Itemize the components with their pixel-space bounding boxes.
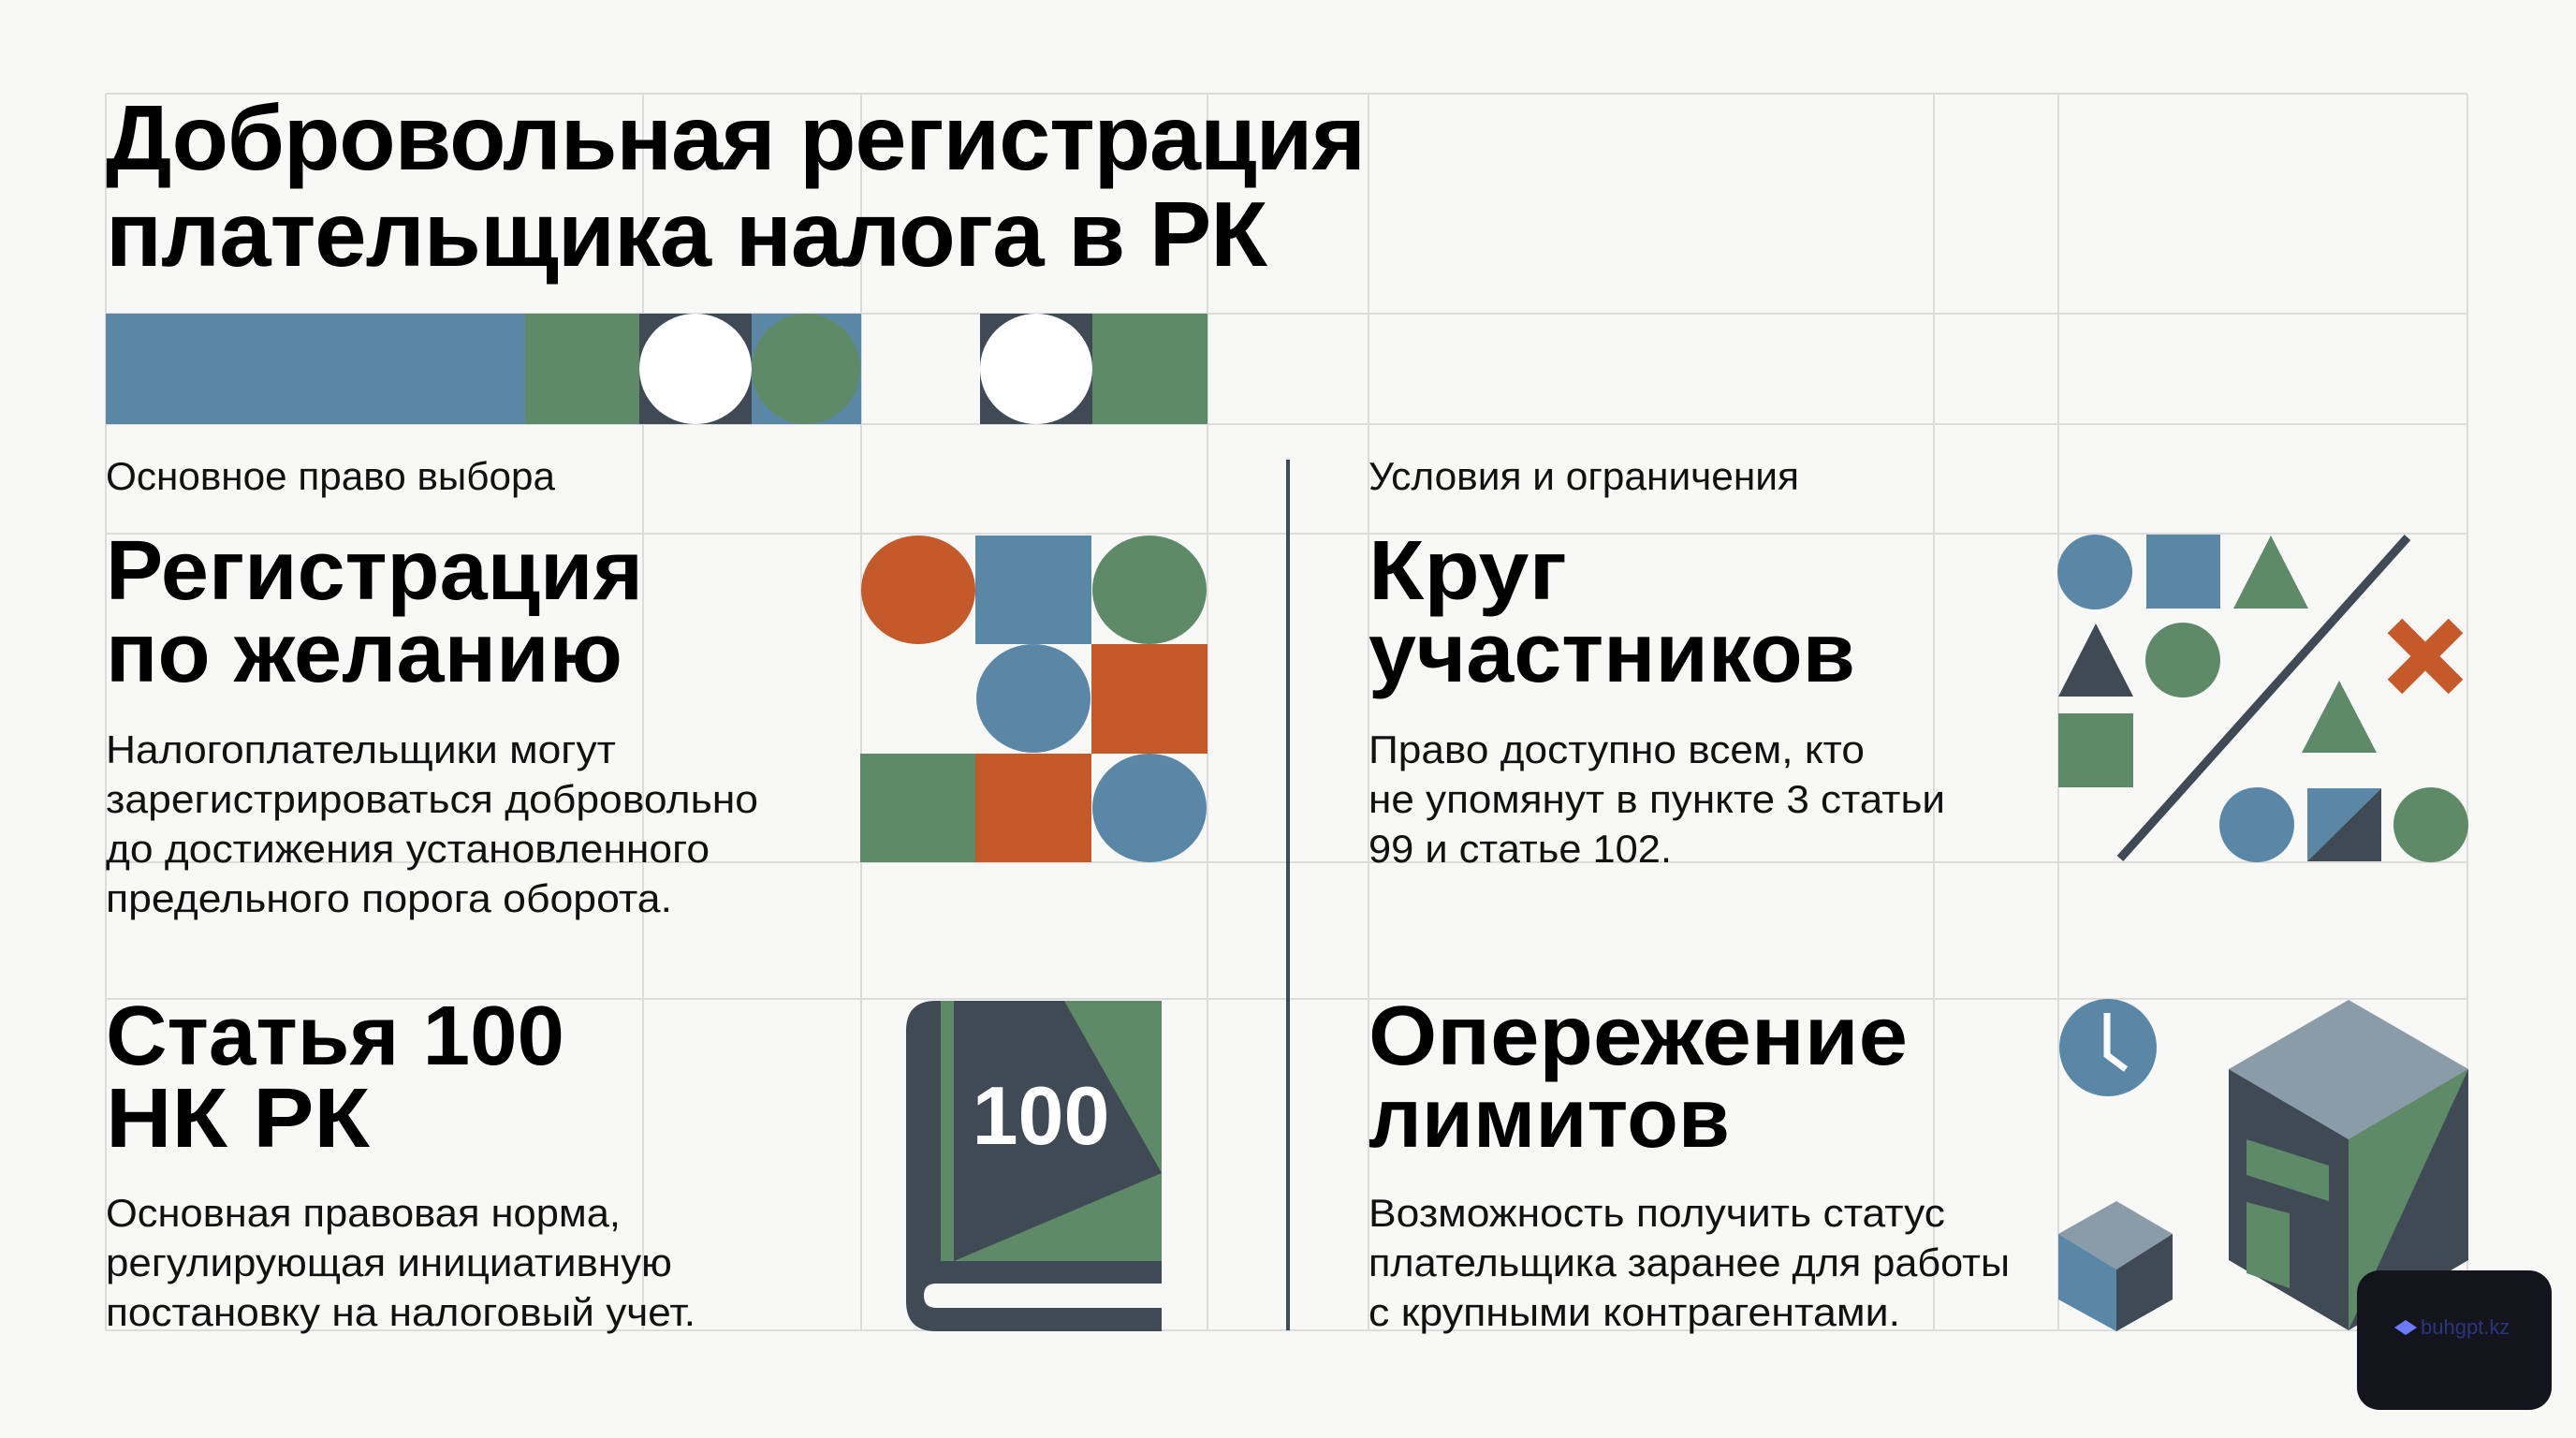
block: Опережение лимитов: плательщика заранее для работы <box>1368 1240 2010 1284</box>
watermark badge <box>2357 1270 2552 1410</box>
block: Опережение лимитов: с крупными контрагентами. <box>1368 1290 1900 1334</box>
section label: right: Условия и ограничения <box>1368 454 1799 498</box>
icon: book 100 <box>906 1001 1162 1331</box>
block: Статья 100 НК РК: Статья 100 <box>106 990 564 1083</box>
block: Регистрация по желанию: Налогоплательщики могут <box>106 727 616 771</box>
icon: book 100: 100 <box>973 1069 1109 1162</box>
title: Добровольная регистрация <box>106 86 1365 189</box>
section label: left: Основное право выбора <box>106 454 556 498</box>
block: Регистрация по желанию: Регистрация <box>106 524 643 618</box>
icon: big cube building <box>2229 1000 2468 1330</box>
title <box>106 86 1365 286</box>
block: Статья 100 НК РК: постановку на налоговый учет. <box>106 1290 695 1334</box>
icon: small cube <box>2058 1201 2173 1331</box>
block: Круг участников: Право доступно всем, кто <box>1368 727 1865 771</box>
icon: shape mosaic <box>860 536 1208 862</box>
block: Круг участников: не упомянут в пункте 3 статьи <box>1368 777 1945 821</box>
block: Статья 100 НК РК: Основная правовая норма, <box>106 1191 621 1235</box>
decorative color strip <box>106 314 1208 424</box>
block: Статья 100 НК РК <box>106 990 695 1334</box>
block: Опережение лимитов: Возможность получить статус <box>1368 1191 1945 1235</box>
block: Регистрация по желанию: зарегистрироваться добровольно <box>106 777 758 821</box>
block: Круг участников: Круг <box>1368 524 1567 618</box>
block: Регистрация по желанию: до достижения установленного <box>106 827 710 871</box>
block: Опережение лимитов: лимитов <box>1368 1072 1730 1166</box>
title: плательщика налога в РК <box>106 183 1267 286</box>
divider <box>1286 460 1290 1330</box>
icon: clock <box>2059 999 2157 1096</box>
block: Опережение лимитов: Опережение <box>1368 990 1908 1083</box>
watermark badge: buhgpt.kz <box>2421 1315 2510 1339</box>
icon: participants shapes <box>2057 535 2486 862</box>
block: Статья 100 НК РК: регулирующая инициативную <box>106 1240 672 1284</box>
block: Круг участников: 99 и статье 102. <box>1368 827 1672 871</box>
block: Круг участников: участников <box>1368 607 1855 700</box>
block: Регистрация по желанию <box>106 524 758 920</box>
block: Круг участников <box>1368 524 1945 871</box>
block: Статья 100 НК РК: НК РК <box>106 1072 371 1166</box>
block: Регистрация по желанию: предельного порога оборота. <box>106 876 672 920</box>
block: Регистрация по желанию: по желанию <box>106 607 622 700</box>
block: Опережение лимитов <box>1368 990 2010 1334</box>
